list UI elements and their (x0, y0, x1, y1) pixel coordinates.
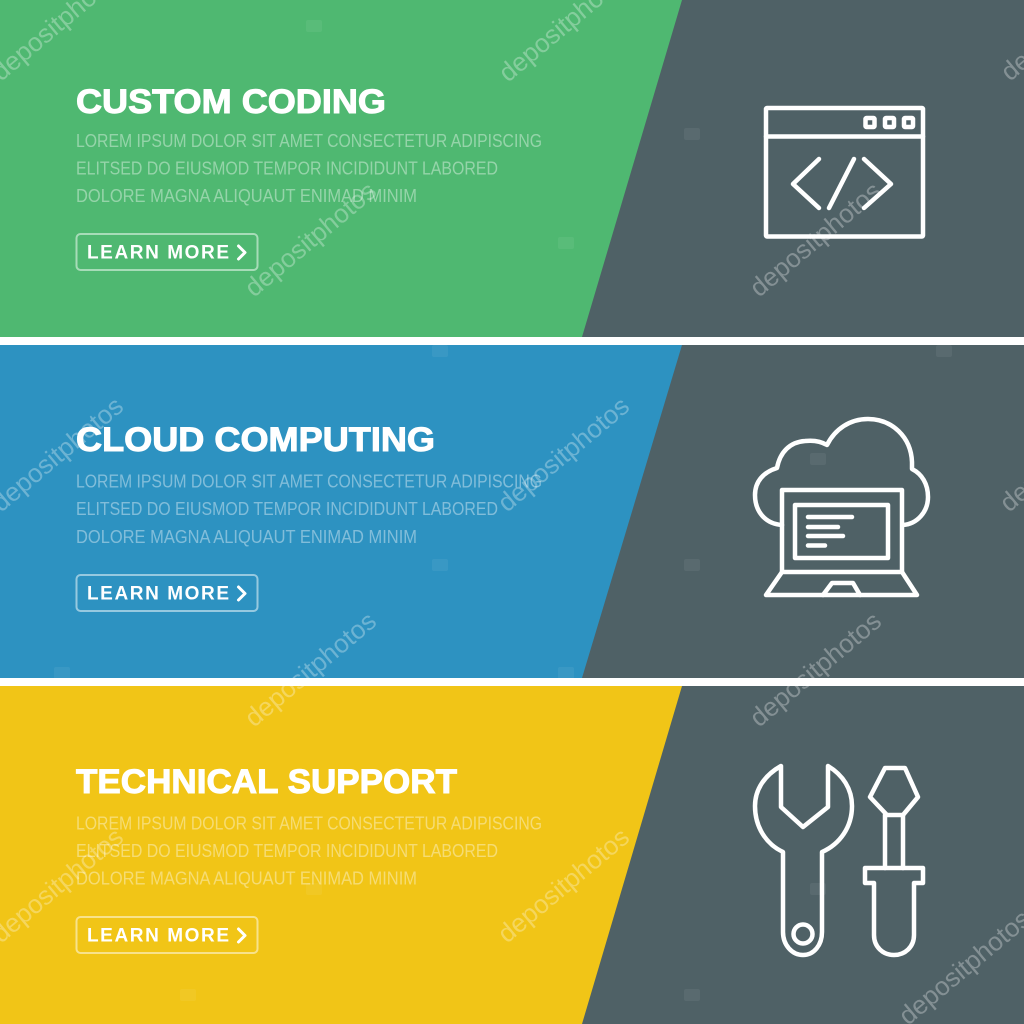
button: learn more (76, 917, 258, 953)
icon: wrench (755, 766, 852, 955)
watermarks: depositphotos (492, 391, 635, 518)
icon: wrench and screwdriver (755, 766, 923, 955)
text block: technical support description (76, 814, 542, 888)
text block: cloud computing description: LOREM IPSUM DOLOR SIT AMET CONSECTETUR ADIPISCING (76, 472, 542, 492)
text block: technical support description: DOLORE MAGNA ALIQUAUT ENIMAD MINIM (76, 868, 417, 888)
text block: cloud computing description: DOLORE MAGNA ALIQUAUT ENIMAD MINIM (76, 527, 417, 547)
button: learn more: LEARN MORE (87, 242, 229, 264)
heading: technical support: TECHNICAL SUPPORT (76, 763, 457, 801)
panel: custom coding (0, 0, 1024, 337)
text block: technical support description: LOREM IPSUM DOLOR SIT AMET CONSECTETUR ADIPISCING (76, 814, 542, 834)
button: learn more: LEARN MORE (87, 926, 229, 946)
text block: custom coding description: ELITSED DO EIUSMOD TEMPOR INCIDIDUNT LABORED (76, 158, 498, 178)
icon: code window (766, 108, 923, 236)
panel: cloud computing (0, 345, 1024, 678)
heading: custom coding: CUSTOM CODING (76, 83, 386, 121)
button: learn more: LEARN MORE (87, 584, 229, 604)
panel: technical support (0, 686, 1024, 1024)
text block: custom coding description: LOREM IPSUM DOLOR SIT AMET CONSECTETUR ADIPISCING (76, 131, 542, 151)
icon: screwdriver (865, 768, 923, 955)
button: learn more (76, 575, 258, 611)
text block: cloud computing description (76, 472, 542, 547)
icon: cloud with laptop (755, 419, 928, 595)
text block: technical support description: ELITSED DO EIUSMOD TEMPOR INCIDIDUNT LABORED (76, 841, 498, 861)
watermarks: depositphotos (744, 176, 887, 303)
watermarks: depositphotos (239, 606, 382, 733)
watermarks: depositphotos (492, 822, 635, 949)
watermarks: depositphotos (744, 606, 887, 733)
text block: cloud computing description: ELITSED DO EIUSMOD TEMPOR INCIDIDUNT LABORED (76, 499, 498, 519)
text block: custom coding description (76, 131, 542, 206)
watermarks: depositphotos (239, 176, 382, 303)
button: learn more (76, 234, 258, 270)
heading: cloud computing: CLOUD COMPUTING (76, 421, 435, 459)
text block: custom coding description: DOLORE MAGNA ALIQUAUT ENIMAD MINIM (76, 186, 417, 206)
